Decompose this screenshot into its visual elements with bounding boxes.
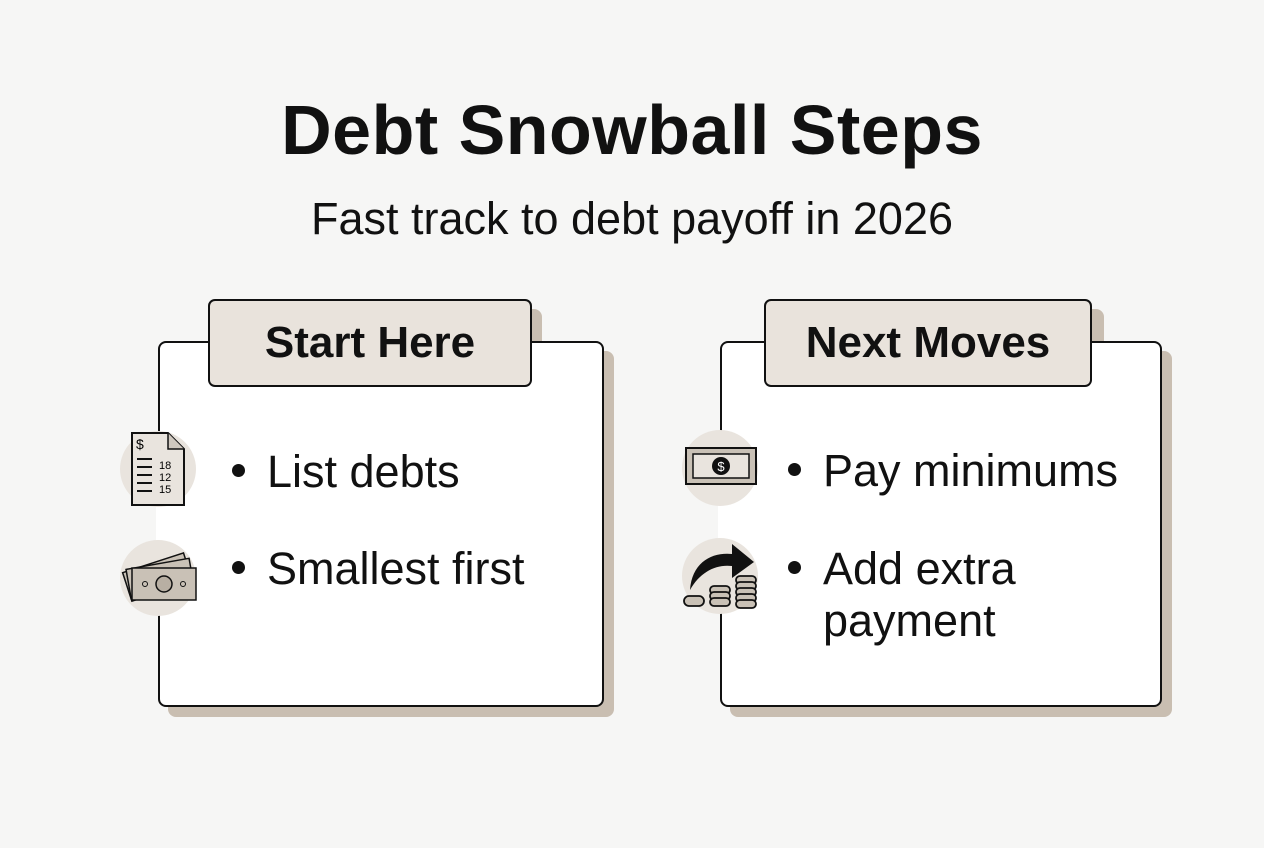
panel: start here [120, 299, 614, 717]
icon: cash stack [120, 540, 197, 616]
icon: debt list: 15 [159, 484, 171, 496]
icon: arrow and coins [682, 538, 758, 614]
heading: start here: Start Here [265, 318, 475, 367]
title: Debt Snowball Steps [281, 91, 983, 169]
heading: next moves [764, 299, 1092, 387]
panel: next moves [682, 299, 1172, 717]
icon: debt list: 18 [159, 460, 171, 472]
text: add extra payment [788, 543, 1016, 646]
heading: start here [208, 299, 532, 387]
icon: debt list: $ [136, 436, 144, 452]
subtitle: Fast track to debt payoff in 2026 [311, 193, 953, 244]
text: add extra payment: payment [823, 595, 996, 646]
icon: dollar bill: $ [717, 459, 725, 474]
text: list debts: List debts [267, 446, 460, 497]
text: pay minimums: Pay minimums [823, 445, 1118, 496]
icon: debt list: 12 [159, 472, 171, 484]
text: smallest first: Smallest first [267, 543, 525, 594]
icon: debt list [120, 431, 196, 540]
icon: dollar bill [682, 430, 758, 538]
heading: next moves: Next Moves [806, 318, 1050, 367]
text: add extra payment: Add extra [823, 543, 1016, 594]
